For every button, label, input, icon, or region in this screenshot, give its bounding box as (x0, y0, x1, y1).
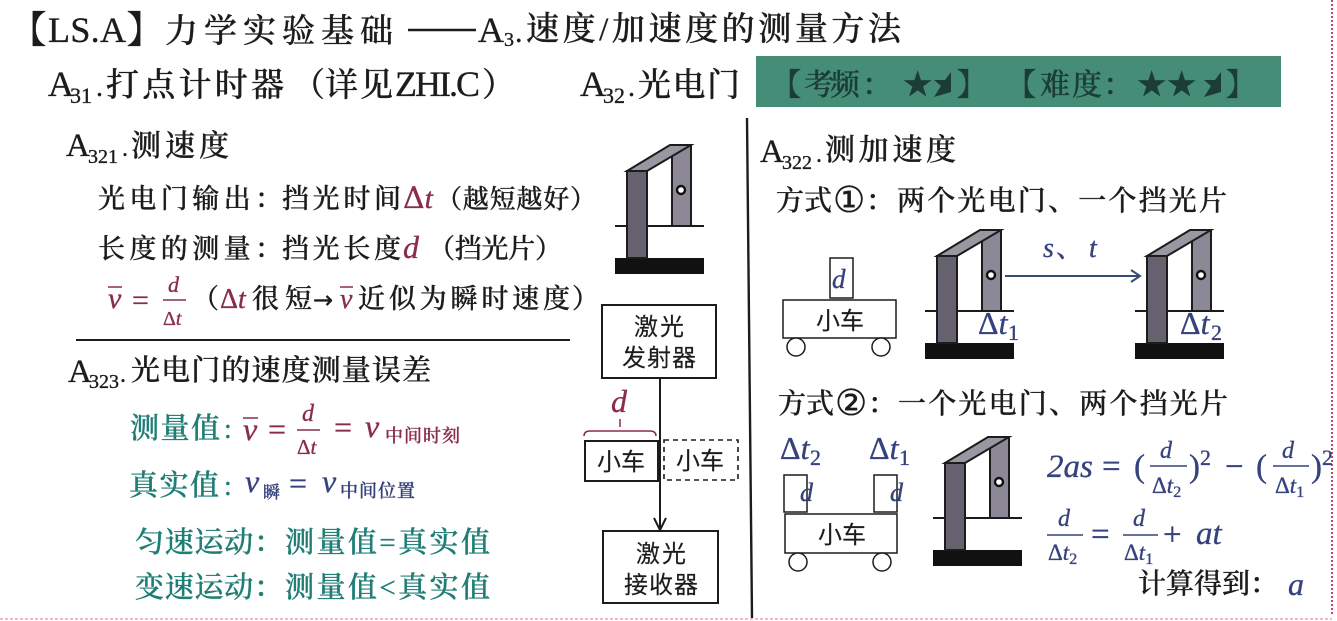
label: delta t2: Δt (1180, 305, 1211, 341)
formula: 2as equation: − (1225, 449, 1244, 485)
text: result a (1138, 566, 1304, 602)
formula: 2as equation: d (1160, 438, 1173, 464)
text: length measurement: 长度的测量： (98, 234, 282, 264)
heading: A323 (68, 354, 431, 393)
formula: 2as equation: 2 (1173, 484, 1181, 501)
text: result a: 计算得到 (1138, 568, 1250, 600)
heading: A31 spark timer: ） (482, 68, 515, 104)
formula: 2as equation: 2 (1322, 445, 1333, 470)
heading: A31 spark timer: 31 (70, 83, 92, 108)
text: variable motion: 变速运动： (135, 571, 283, 604)
banner: exam frequency and difficulty: 】 (1226, 69, 1256, 102)
formula: average velocity (108, 272, 599, 330)
heading: A31 spark timer: 详见 (325, 67, 393, 104)
banner: exam frequency and difficulty: ★ (1136, 65, 1167, 105)
panel: A321 velocity measurement (66, 128, 704, 330)
text: method 1: 方式 (776, 185, 832, 217)
heading: A32 photogate: A (580, 64, 606, 104)
heading: A323: 光电门的速度测量误差 (131, 354, 431, 387)
formula: average velocity: 很短 (252, 284, 312, 314)
text: photogate output: （越短越好） (436, 185, 596, 214)
formula: measured value: = (334, 409, 352, 445)
formula: average velocity: 近似为瞬时速度 (358, 284, 570, 314)
text: method 1: ① (833, 180, 865, 221)
label: delta t2: 2 (1211, 320, 1222, 345)
heading: A32 photogate (580, 64, 740, 108)
heading: A321: A (66, 128, 90, 164)
title: . (515, 16, 522, 49)
heading: A321: 测速度 (131, 130, 229, 163)
formula: true value: 中间位置 (340, 481, 415, 501)
banner: exam frequency and difficulty: 考频 (804, 69, 861, 102)
title: 】 (127, 10, 163, 50)
banner: exam frequency and difficulty: ： (862, 69, 892, 102)
formula: true value: 瞬 (263, 483, 280, 502)
formula: measured value: 中间时刻 (385, 426, 460, 446)
formula: true value (129, 463, 415, 502)
formula: velocity relation: 2 (1069, 551, 1077, 568)
formula: velocity relation: = (1091, 517, 1110, 553)
title: LS.A (48, 10, 126, 50)
formula: true value: v (322, 463, 337, 499)
formula: velocity relation: at (1196, 516, 1222, 552)
diagram: cart with two flags: 1 (899, 445, 910, 470)
panel: A322 acceleration measurement (760, 134, 1333, 602)
diagram: cart with one flag (783, 258, 896, 356)
text: length measurement (98, 229, 562, 265)
heading: A31 spark timer: （ (292, 68, 325, 104)
formula: 2as equation: 2as (1047, 449, 1093, 485)
diagram: cart with two flags: 2 (810, 445, 821, 470)
text: method 1: 两个光电门、一个挡光片 (897, 185, 1227, 217)
formula: velocity relation (1047, 506, 1222, 568)
box: cart dashed position: 小车 (676, 448, 724, 475)
box: laser receiver: 激光 (636, 541, 686, 568)
heading: A322: . (816, 142, 822, 168)
formula: velocity relation: d (1058, 506, 1071, 532)
formula: 2as equation: ) (1311, 449, 1322, 485)
label: delta t1 (978, 305, 1019, 345)
label: delta t1: 1 (1008, 320, 1019, 345)
formula: average velocity: → (313, 286, 333, 314)
arrow: s, t between gates (1005, 233, 1140, 282)
formula: 2as equation: d (1282, 438, 1295, 464)
formula: measured value: = (268, 411, 286, 447)
title (10, 10, 902, 51)
formula: average velocity: （ (192, 284, 219, 314)
formula: measured value: 测量值 (130, 412, 220, 445)
text: photogate output: 光电门输出： (98, 184, 282, 214)
formula: average velocity: v (340, 284, 353, 315)
text: length measurement: （挡光片） (428, 234, 562, 264)
banner: exam frequency and difficulty: ★ (1166, 65, 1197, 105)
formula: true value: = (289, 465, 307, 501)
formula: average velocity: d (168, 272, 180, 297)
formula: velocity relation: d (1133, 506, 1146, 532)
formula: average velocity: Δt (220, 284, 247, 315)
diagram: cart with two flags: Δt (780, 430, 811, 466)
box: laser emitter: 激光 (634, 314, 684, 341)
formula: 2as equation: Δt (1275, 473, 1296, 498)
text: method 2: 一个光电门、两个挡光片 (898, 388, 1228, 420)
title: 力学实验基础 (165, 13, 393, 50)
formula: average velocity: = (132, 284, 149, 317)
text: photogate output: 挡光时间 (282, 184, 401, 214)
formula: 2as equation: Δt (1152, 473, 1173, 498)
box: laser emitter: 发射器 (622, 345, 696, 372)
title: 3 (504, 29, 514, 51)
label: delta t1: Δt (978, 305, 1009, 341)
heading: A32 photogate: . (628, 72, 635, 103)
heading: A32 photogate: 32 (603, 83, 625, 108)
heading: A31 spark timer: 打点计时器 (106, 67, 284, 104)
label: delta t2 (1180, 305, 1222, 345)
formula: velocity relation: Δt (1124, 540, 1145, 565)
formula: average velocity: v (108, 282, 122, 315)
text: uniform motion (135, 526, 490, 559)
text: uniform motion: 匀速运动： (135, 526, 283, 559)
heading: A322: A (760, 134, 784, 170)
heading: A31 spark timer: A (48, 64, 74, 104)
box: laser receiver: 接收器 (624, 572, 698, 599)
formula: 2as equation: ) (1189, 449, 1200, 485)
formula: velocity relation: 1 (1145, 551, 1153, 568)
icon: photogate 1 (925, 230, 1014, 359)
formula: measured value (130, 401, 460, 459)
heading: A321: 321 (88, 146, 118, 168)
banner: exam frequency and difficulty: 】 (957, 69, 987, 102)
formula: true value: 真实值 (129, 469, 219, 502)
diagram: cart with two flags (780, 430, 910, 571)
text: result a: ： (1250, 569, 1278, 600)
formula: 2as equation: 2 (1200, 445, 1211, 470)
text: variable motion (135, 571, 490, 604)
title: 速度/加速度的测量方法 (526, 11, 902, 48)
text: length measurement: d (403, 229, 420, 265)
arrow: s, t between gates: s (1043, 233, 1054, 264)
heading: A323: . (120, 362, 126, 388)
formula: average velocity: ） (572, 284, 599, 314)
box: laser emitter (602, 305, 716, 378)
heading: A323: A (68, 354, 92, 390)
title: A (478, 10, 504, 50)
formula: 2as equation: 1 (1296, 484, 1304, 501)
icon: photogate 2 (1135, 230, 1224, 359)
text: variable motion: 测量值<真实值 (285, 571, 490, 604)
banner: exam frequency and difficulty: 【 (1006, 69, 1036, 102)
text: photogate output: Δt (403, 181, 434, 216)
heading: A323: 323 (89, 371, 119, 393)
diagram: cart with two flags: d (800, 478, 814, 507)
formula: measured value: v (365, 408, 380, 444)
formula: 2as equation (1047, 438, 1333, 501)
heading: A322: 322 (782, 152, 812, 174)
heading: A32 photogate: 光电门 (638, 67, 740, 104)
panel: A323 measurement error (68, 354, 490, 604)
box: cart: 小车 (597, 449, 645, 476)
box: cart (585, 441, 658, 481)
banner: exam frequency and difficulty: ★ (902, 65, 933, 105)
text: method 2: ： (868, 389, 896, 420)
formula: measured value: Δt (297, 435, 318, 459)
formula: true value: v (245, 463, 260, 499)
label: width d with brace: d (611, 383, 628, 419)
arrow: s, t between gates: 、 (1056, 234, 1082, 263)
box: laser receiver (603, 531, 718, 603)
diagram: cart with two flags: d (890, 478, 904, 507)
label: width d with brace (584, 383, 656, 436)
text: method 2: ② (835, 383, 867, 424)
text: length measurement: 挡光长度 (282, 234, 401, 264)
banner: exam frequency and difficulty: 【 (771, 69, 801, 102)
diagram: laser emitter, cart and receiver (584, 305, 738, 603)
diagram: cart with two flags: 小车 (818, 522, 866, 549)
text: photogate output (98, 181, 596, 216)
text: method 2 (778, 383, 1228, 424)
diagram: cart with one flag: d (832, 264, 846, 294)
diagram: cart with one flag: 小车 (816, 308, 864, 335)
diagram: cart with two flags: Δt (869, 430, 900, 466)
heading: A31 spark timer (48, 64, 515, 108)
icon: photogate 3 (933, 437, 1022, 566)
text: method 2: 方式 (778, 388, 834, 420)
banner: exam frequency and difficulty (756, 56, 1281, 107)
box: cart dashed position (664, 440, 738, 480)
icon: photogate (615, 145, 704, 274)
formula: measured value: v (243, 411, 258, 447)
banner: exam frequency and difficulty: ： (1103, 69, 1133, 102)
text: method 1: ： (866, 186, 894, 217)
text: method 1 (776, 180, 1227, 221)
formula: average velocity: Δt (163, 308, 182, 330)
formula: 2as equation: = (1102, 449, 1121, 485)
heading: A31 spark timer: . (96, 72, 103, 103)
text: uniform motion: 测量值=真实值 (285, 526, 490, 559)
heading: A31 spark timer: ZHI.C (395, 64, 480, 104)
arrow: s, t between gates: t (1089, 233, 1098, 264)
heading: A322: 测加速度 (825, 134, 956, 167)
formula: velocity relation: Δt (1048, 540, 1069, 565)
formula: true value: : (224, 471, 232, 502)
text: result a: a (1288, 566, 1304, 602)
heading: A321: . (122, 136, 128, 162)
formula: 2as equation: ( (1256, 449, 1267, 485)
heading: A322 (760, 134, 956, 174)
formula: 2as equation: ( (1134, 449, 1145, 485)
formula: measured value: : (224, 414, 232, 445)
heading: A321 (66, 128, 229, 168)
banner: exam frequency and difficulty: 难度 (1040, 69, 1102, 102)
formula: measured value: d (302, 401, 315, 427)
formula: velocity relation: + (1163, 517, 1182, 553)
title: 【 (10, 10, 46, 50)
arrow: laser beam (654, 378, 666, 530)
